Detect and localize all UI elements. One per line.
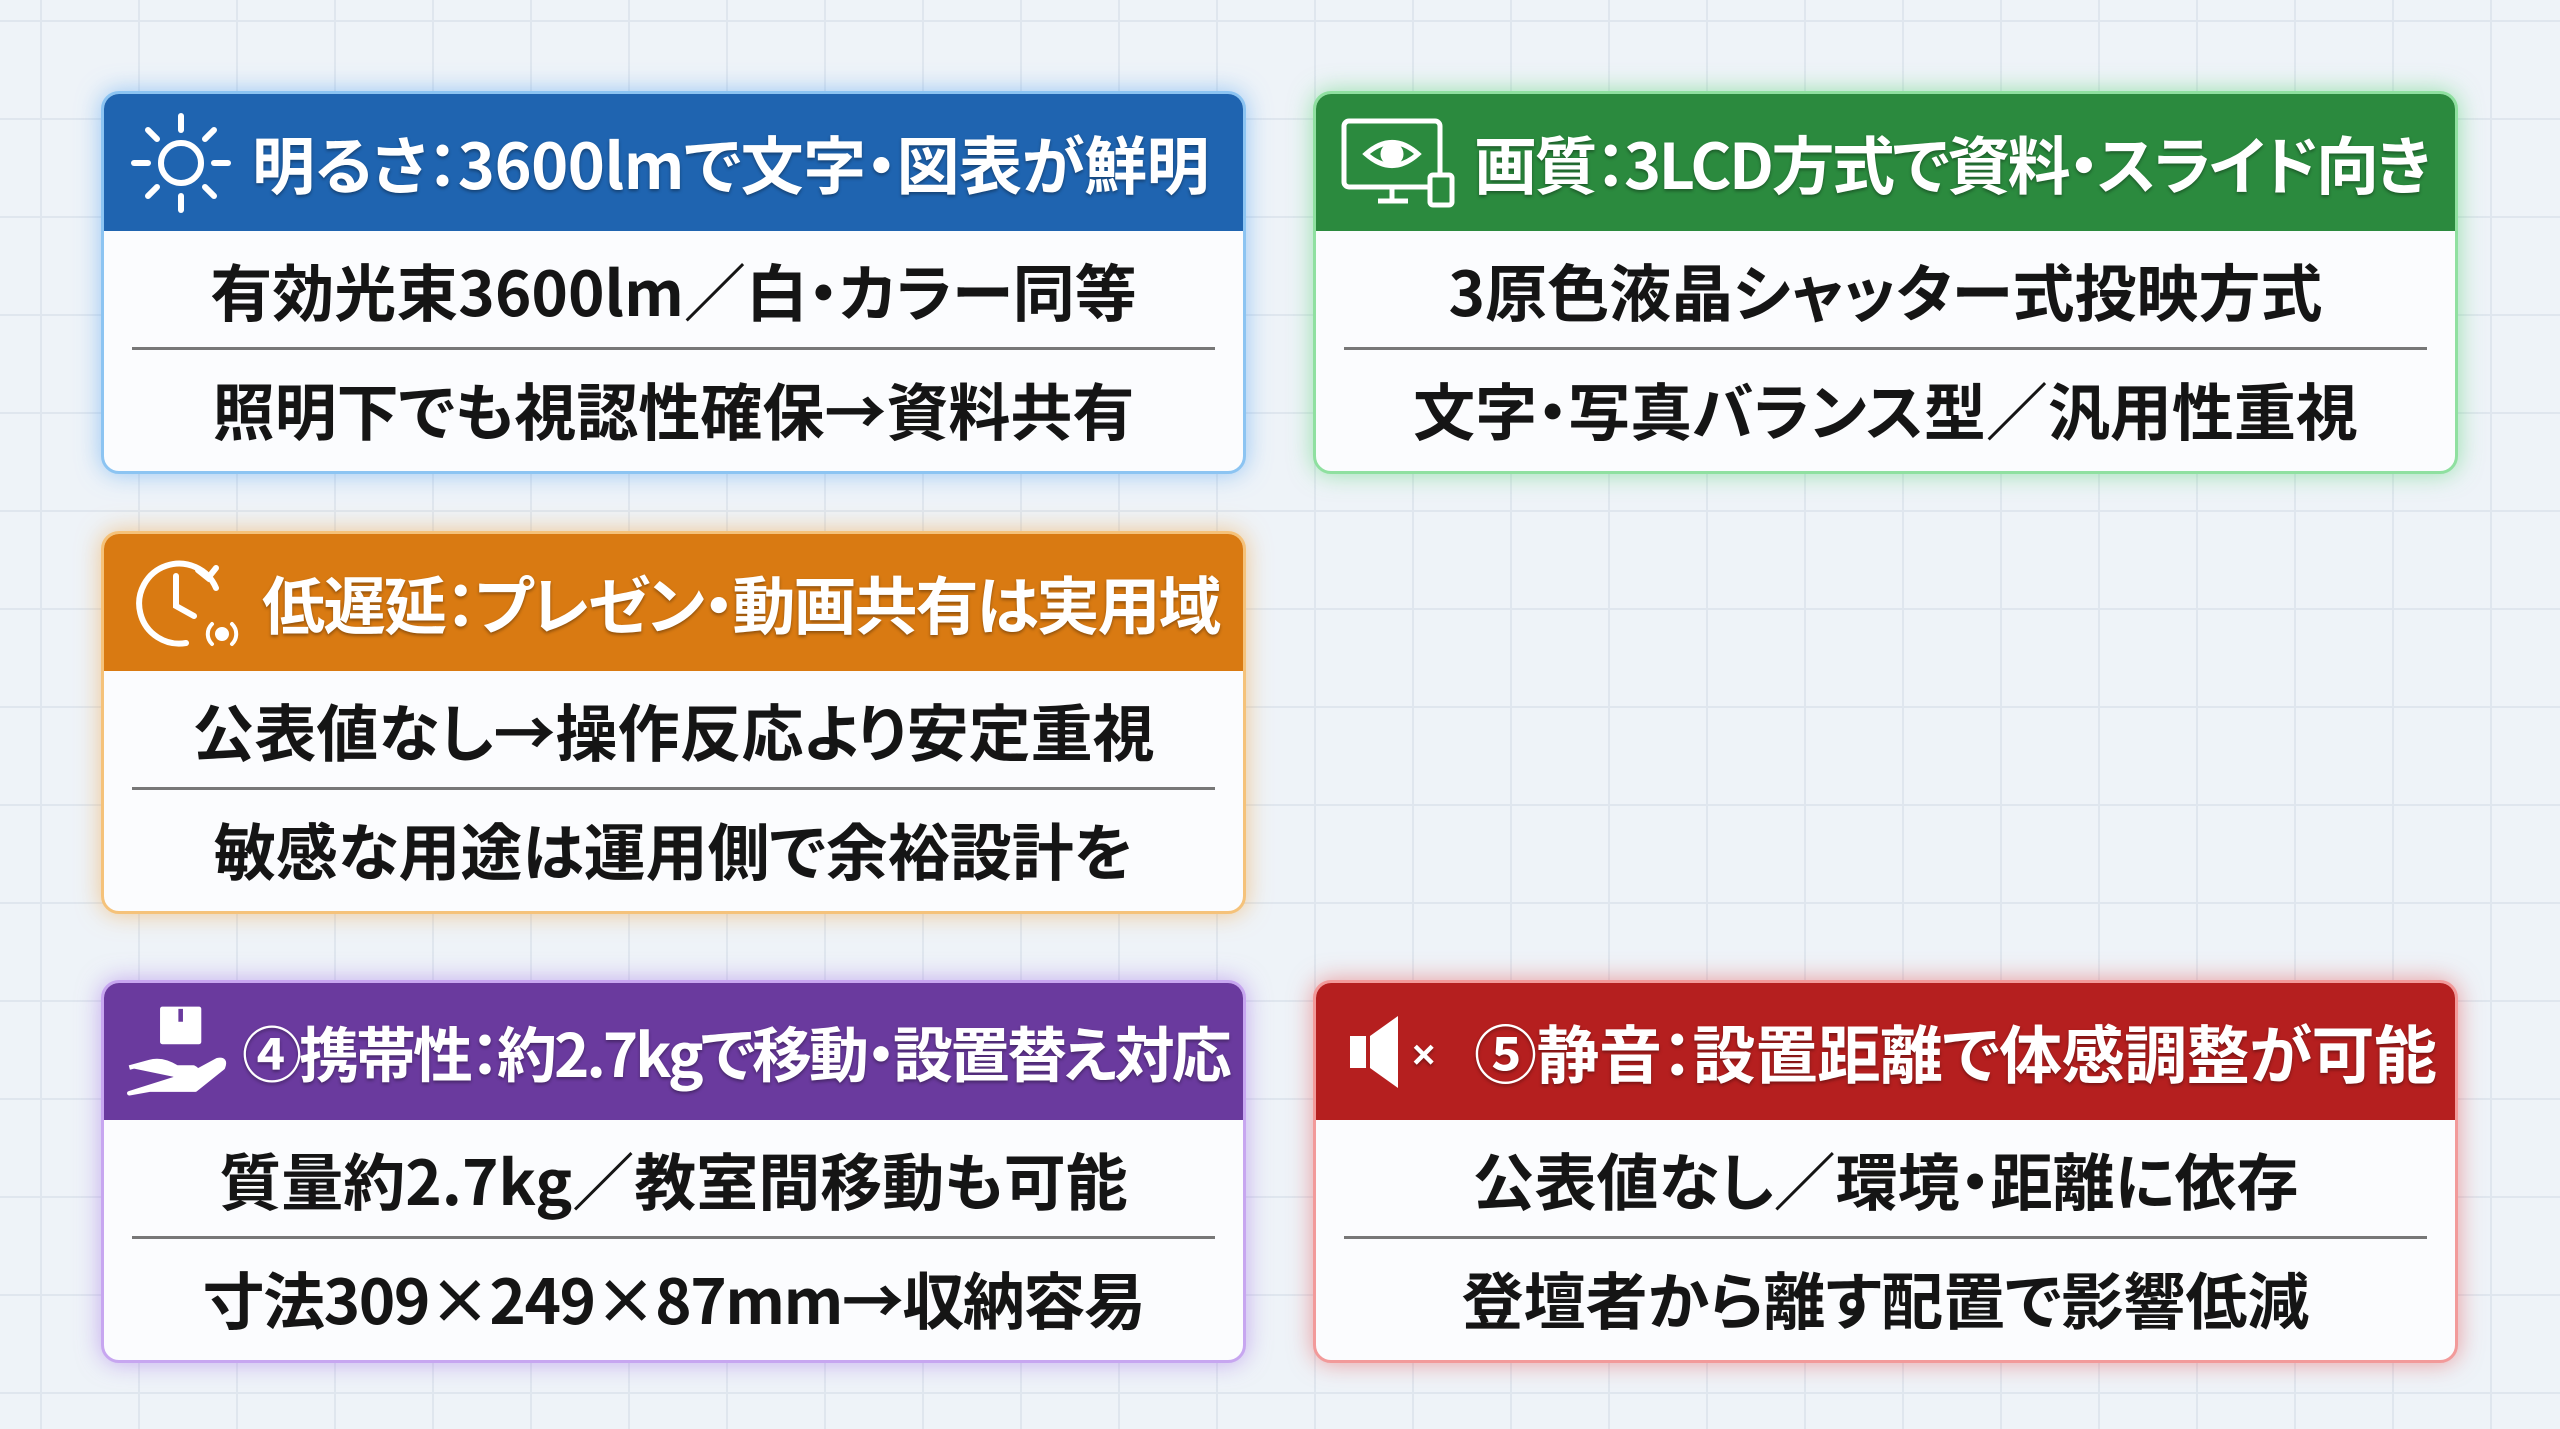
icon: sun [131, 113, 231, 213]
icon: muted speaker: × [1412, 1032, 1435, 1076]
panel: brightness [101, 91, 1246, 474]
text: quality line 2: 文字・写真バランス型／汎用性重視 [1413, 363, 2358, 453]
icon: hand with box [127, 1006, 226, 1096]
header: image quality [1316, 94, 2455, 231]
header: image quality: 画質：3LCD方式で資料・スライド向き [1474, 117, 2428, 208]
text: quiet line 1: 公表値なし／環境・距離に依存 [1472, 1133, 2299, 1223]
header: brightness: 明るさ：3600lmで文字・図表が鮮明 [252, 117, 1209, 208]
header: portability: ④携帯性：約2.7kgで移動・設置替え対応 [242, 1008, 1229, 1095]
text: portability line 2: 寸法309×249×87mm→収納容易 [203, 1252, 1144, 1342]
text: latency line 2: 敏感な用途は運用側で余裕設計を [214, 803, 1133, 893]
header: latency [104, 534, 1243, 671]
panel: quiet [1313, 980, 2458, 1363]
text: brightness line 1: 有効光束3600lm／白・カラー同等 [210, 244, 1137, 334]
text: portability line 1: 質量約2.7kg／教室間移動も可能 [219, 1133, 1128, 1223]
panel: portability [101, 980, 1246, 1363]
icon: monitor eye [1342, 118, 1454, 208]
text: quality line 1: 3原色液晶シャッター式投映方式 [1449, 244, 2322, 334]
header: portability [104, 983, 1243, 1120]
icon: clock with signal [136, 560, 238, 647]
panel: image quality [1313, 91, 2458, 474]
header: quiet: ⑤静音：設置距離で体感調整が可能 [1474, 1006, 2436, 1097]
text: brightness line 2: 照明下でも視認性確保→資料共有 [213, 363, 1134, 453]
icon: muted speaker [1350, 1016, 1435, 1088]
text: latency line 1: 公表値なし→操作反応より安定重視 [192, 684, 1155, 774]
header: latency: 低遅延：プレゼン・動画共有は実用域 [262, 557, 1220, 648]
header: brightness [104, 94, 1243, 231]
panel: latency [101, 531, 1246, 914]
header: quiet [1316, 983, 2455, 1120]
text: quiet line 2: 登壇者から離す配置で影響低減 [1462, 1252, 2309, 1342]
